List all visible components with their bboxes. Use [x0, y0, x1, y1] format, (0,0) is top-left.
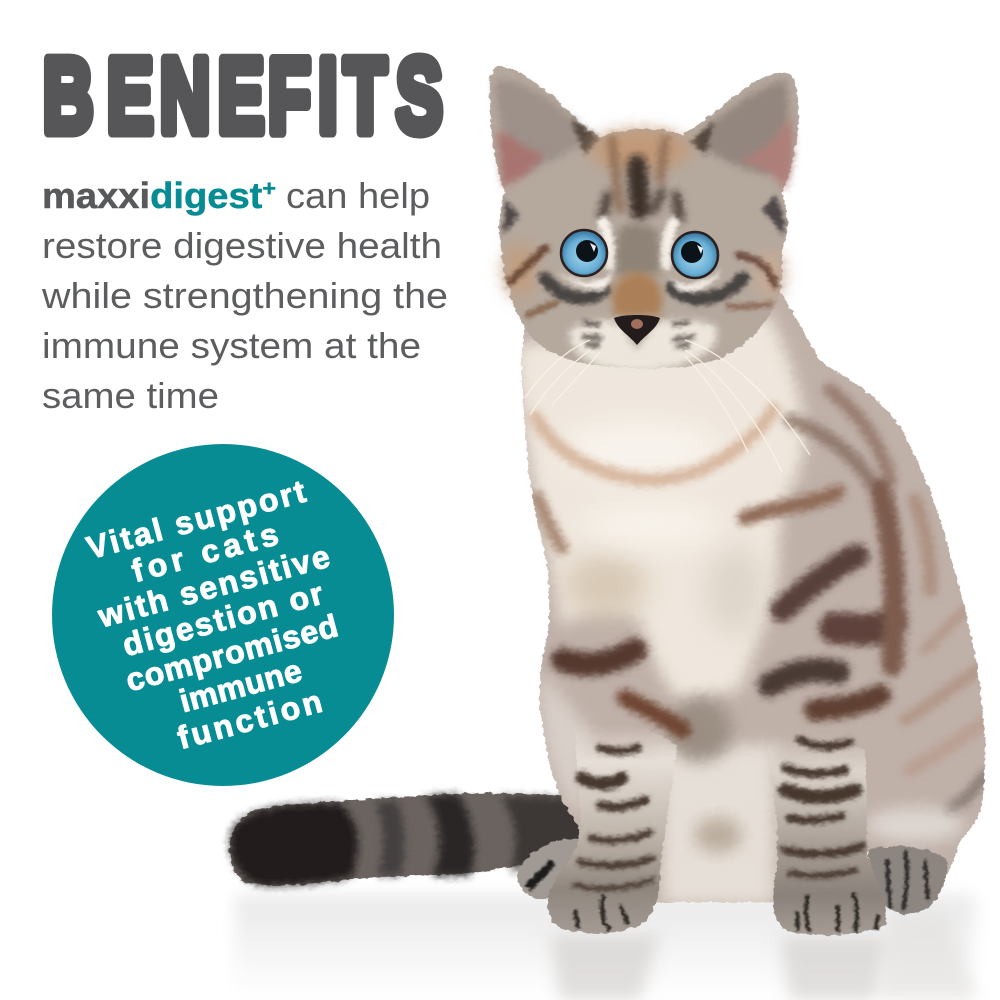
teal circle	[52, 444, 394, 786]
cat head	[490, 67, 798, 372]
front leg left	[548, 723, 677, 933]
nose bridge	[615, 224, 660, 275]
cat face details	[561, 230, 718, 345]
left front paw toes	[575, 895, 628, 930]
front leg right	[767, 733, 886, 935]
right ear pink	[740, 115, 793, 190]
forehead stripes	[602, 140, 680, 218]
head side shadows	[503, 195, 784, 235]
back paw right	[868, 846, 948, 914]
cheek markings	[510, 248, 775, 315]
nose pink	[631, 319, 643, 329]
text block: intro description	[41, 175, 448, 416]
callout text: immune	[176, 652, 306, 719]
right ear grey fur	[695, 80, 789, 175]
left side pale edge	[539, 670, 590, 820]
cat tail	[230, 793, 585, 886]
cat photo illustration	[230, 67, 985, 935]
callout text: function	[174, 683, 326, 756]
intro line 3: while strengthening the	[41, 275, 448, 316]
chest between legs	[662, 745, 775, 905]
callout text: Vital support	[83, 473, 310, 566]
ears and skull shape	[490, 67, 798, 369]
callout badge: vital support	[52, 444, 394, 786]
flank stripes	[537, 390, 985, 810]
intro line 1 end: can help	[286, 175, 430, 216]
left ear pink	[497, 130, 545, 187]
warm cheek and forehead	[504, 130, 784, 300]
neck collar	[533, 404, 777, 480]
callout text	[76, 471, 369, 768]
chest warm shading	[563, 553, 647, 617]
brand name: maxxidigest+: maxxidigest	[42, 175, 256, 216]
chest fur	[515, 315, 804, 700]
intro line 5: same time	[42, 375, 219, 416]
lower haunch light	[865, 807, 965, 843]
nose	[614, 315, 660, 345]
callout text: digestion or	[119, 575, 327, 663]
white around eyes	[556, 215, 722, 291]
intro line 2: restore digestive health	[42, 225, 442, 266]
cat body	[515, 290, 985, 905]
whiskers	[525, 340, 810, 472]
callout text: for cats	[128, 516, 282, 589]
floor reflection	[235, 895, 978, 1000]
light muzzle	[569, 320, 717, 372]
muzzle whisker spots	[582, 322, 695, 347]
right front paw toes	[797, 892, 878, 932]
right eye	[672, 232, 718, 278]
left eye	[561, 230, 607, 276]
left ear grey fur	[495, 79, 590, 175]
heading: Benefits: BENEFITS	[43, 38, 443, 156]
brand name: maxxidigest+: +	[262, 176, 276, 201]
ear base shadows	[570, 118, 715, 155]
intro line 4: immune system at the	[42, 325, 421, 366]
back paw left	[518, 838, 582, 899]
callout text: compromised	[122, 607, 342, 698]
callout text: with sensitive	[93, 538, 334, 635]
